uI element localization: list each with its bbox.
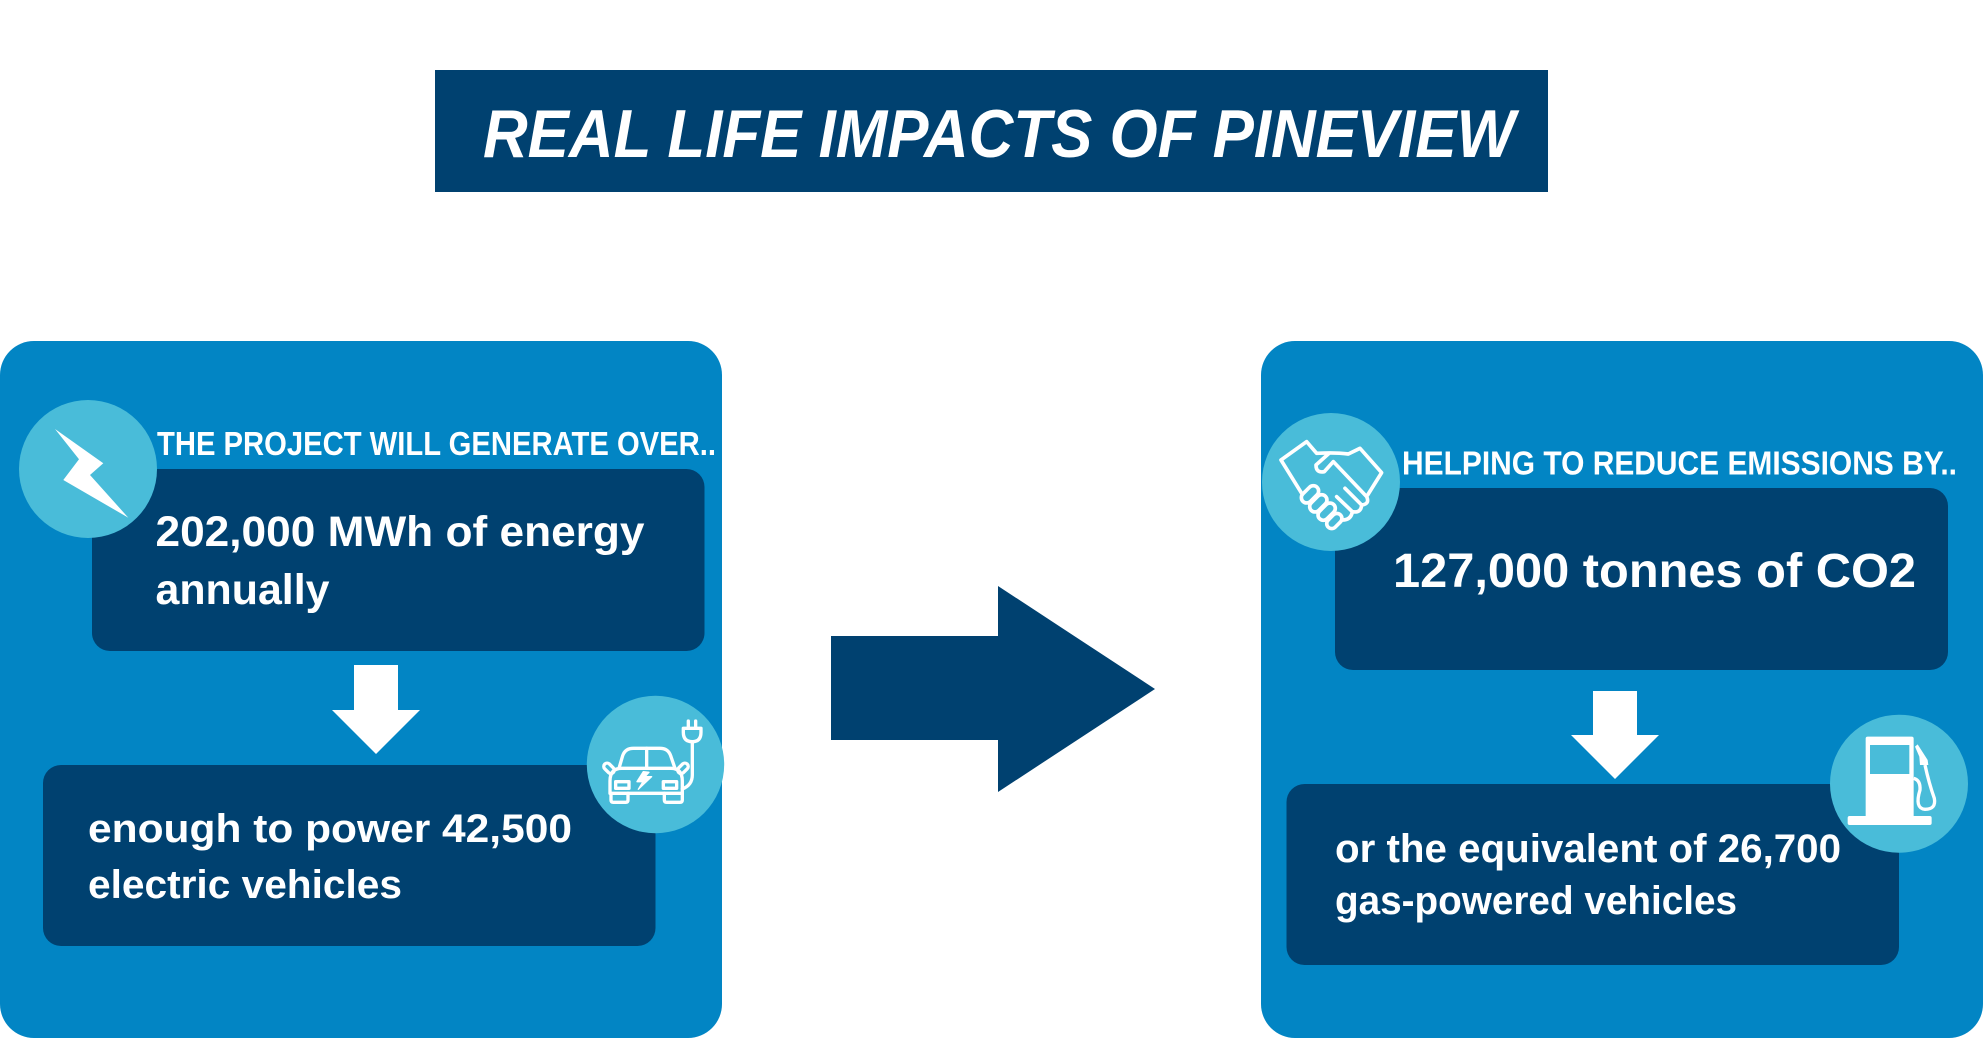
arrow: down to vehicles bbox=[332, 665, 420, 754]
card: gas vehicles: gas-powered vehicles bbox=[1335, 879, 1737, 923]
title banner bbox=[435, 70, 1548, 192]
card: electric vehicles: enough to power 42,500 bbox=[88, 807, 572, 851]
heading: project will generate: THE PROJECT WILL GENERATE OVER.. bbox=[157, 425, 716, 462]
icon: handshake bbox=[1262, 413, 1400, 551]
card: electric vehicles bbox=[43, 765, 656, 946]
arrow: main direction bbox=[831, 586, 1155, 792]
card: electric vehicles: electric vehicles bbox=[88, 863, 402, 907]
card: gas vehicles: or the equivalent of 26,700 bbox=[1335, 827, 1841, 871]
card: annual energy: annually bbox=[156, 566, 330, 614]
panel: emissions reduction bbox=[1261, 341, 1983, 1038]
icon: electric car bbox=[587, 696, 724, 833]
title: REAL LIFE IMPACTS OF PINEVIEW bbox=[483, 96, 1520, 172]
icon: fuel pump bbox=[1830, 715, 1968, 853]
icon: lightning bolt bbox=[19, 400, 157, 538]
card: tonnes of CO2 bbox=[1335, 488, 1948, 670]
card: tonnes of CO2: 127,000 tonnes of CO2 bbox=[1393, 545, 1916, 598]
panel: energy generation bbox=[0, 341, 722, 1038]
arrow: down to vehicles bbox=[1571, 691, 1659, 779]
card: annual energy bbox=[92, 469, 704, 651]
card: annual energy: 202,000 MWh of energy bbox=[156, 508, 645, 556]
card: gas vehicles bbox=[1286, 784, 1899, 965]
